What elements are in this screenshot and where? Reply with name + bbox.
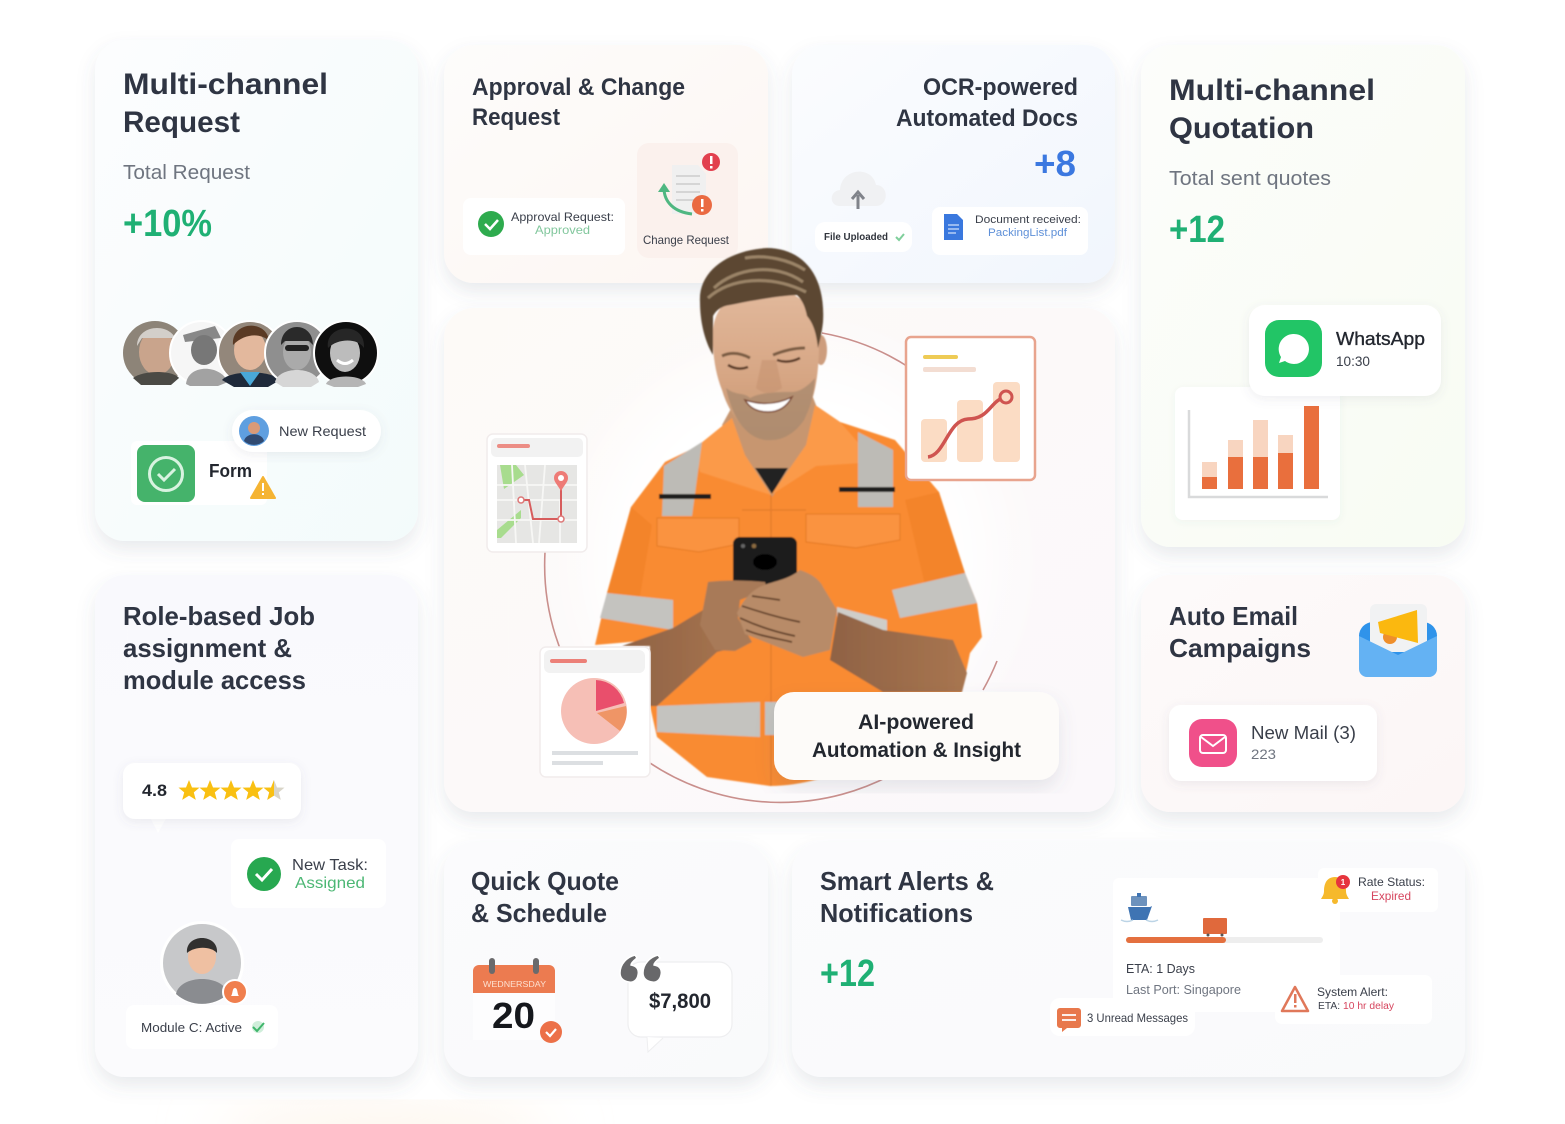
card: system alert: System Alert: xyxy=(1317,985,1388,999)
nose xyxy=(756,360,782,393)
heading: quick quote and schedule: & Schedule xyxy=(471,898,607,928)
reflective straps xyxy=(662,442,702,516)
card: rate status xyxy=(1318,868,1438,912)
card: rating: 4.8 xyxy=(142,781,167,800)
card: document received xyxy=(932,207,1088,255)
heading: approval and change request xyxy=(472,74,685,131)
card: new mail: 223 xyxy=(1251,746,1276,762)
card: system alert: ETA: 10 hr delay xyxy=(1318,1001,1394,1012)
card: new task assigned xyxy=(231,839,386,908)
quote bubble xyxy=(620,955,732,1052)
ring arcs xyxy=(545,333,997,802)
card: form xyxy=(131,441,275,505)
callout: ai-powered automation and insight xyxy=(774,692,1059,780)
card: whatsapp: 10:30 xyxy=(1336,353,1370,369)
collar xyxy=(695,405,875,495)
ear xyxy=(815,335,827,365)
panel: ocr-powered automated docs xyxy=(792,45,1115,283)
pill: new request: New Request xyxy=(279,423,366,439)
card: shipment tracking: ETA: 1 Days xyxy=(1126,961,1195,976)
card: rate status: Rate Status: xyxy=(1358,875,1425,889)
panel: multi-channel request xyxy=(95,40,418,541)
left hand xyxy=(700,580,766,651)
heading: ocr-powered automated docs: Automated Docs xyxy=(896,105,1078,132)
card: whatsapp: WhatsApp xyxy=(1336,329,1425,349)
heading: auto email campaigns: Auto Email xyxy=(1169,601,1298,631)
stat: +10%: +10% xyxy=(123,203,212,245)
heading: auto email campaigns xyxy=(1169,601,1311,663)
callout: ai-powered automation and insight: Automation & Insight xyxy=(812,739,1021,762)
left sleeve strip xyxy=(600,593,673,630)
heading: smart alerts and notifications xyxy=(820,866,994,928)
card: new task assigned: New Task: xyxy=(292,857,368,874)
phone xyxy=(733,537,797,597)
hair highlights xyxy=(708,257,806,298)
callout: ai-powered automation and insight: AI-powered xyxy=(858,711,974,734)
shirt shading xyxy=(607,492,965,596)
heading: role-based job assignment: assignment & xyxy=(123,633,292,663)
label: total request: Total Request xyxy=(123,162,250,184)
label: total sent quotes: Total sent quotes xyxy=(1169,168,1331,190)
panel: smart alerts and notifications xyxy=(792,842,1465,1077)
bar chart xyxy=(1175,387,1340,520)
heading: multi-channel quotation: Multi-channel xyxy=(1169,74,1375,107)
heading: multi-channel request: Multi-channel xyxy=(123,68,328,101)
panel: ai-powered automation and insight xyxy=(444,248,1115,812)
hair xyxy=(700,248,823,355)
heading: multi-channel request: Request xyxy=(123,106,240,139)
icon: user avatar with notification xyxy=(160,921,247,1005)
head xyxy=(713,288,819,440)
card: shipment tracking: Last Port: Singapore xyxy=(1126,982,1241,997)
heading: quick quote and schedule: Quick Quote xyxy=(471,866,619,896)
avatar group xyxy=(123,321,378,387)
heading: quick quote and schedule xyxy=(471,866,619,928)
card: rating xyxy=(123,763,301,833)
card: new mail: New Mail (3) xyxy=(1251,723,1356,743)
card: approval request xyxy=(463,198,625,255)
neck xyxy=(722,395,824,497)
body strip behind hand xyxy=(837,607,887,632)
closed eyes xyxy=(728,358,800,369)
heading: role-based job assignment: module access xyxy=(123,665,306,695)
right sleeve strip xyxy=(892,573,977,618)
heading: smart alerts and notifications: Smart Alerts & xyxy=(820,866,994,896)
panel: role-based job assignment xyxy=(95,575,418,1077)
pill: unread messages: 3 Unread Messages xyxy=(1087,1011,1188,1025)
right forearm xyxy=(830,612,967,692)
card: whatsapp xyxy=(1249,305,1441,396)
smile xyxy=(745,397,792,412)
icon: calendar xyxy=(473,958,562,1043)
heading: multi-channel request xyxy=(123,68,328,139)
chest pockets xyxy=(657,514,900,552)
card: new task assigned: Assigned xyxy=(295,875,365,892)
heading: auto email campaigns: Campaigns xyxy=(1169,633,1311,663)
heading: role-based job assignment xyxy=(123,601,315,695)
pill: module c active xyxy=(126,1005,278,1049)
stat: +8: +8 xyxy=(1034,143,1076,184)
heading: multi-channel quotation: Quotation xyxy=(1169,112,1314,145)
card: change request xyxy=(637,143,738,258)
icon: cloud upload xyxy=(832,172,886,209)
heading: ocr-powered automated docs: OCR-powered xyxy=(923,74,1078,101)
pill: file uploaded: File Uploaded xyxy=(824,232,888,243)
panel: auto email campaigns xyxy=(1141,575,1465,812)
card: form: Form xyxy=(209,461,252,481)
heading: role-based job assignment: Role-based Job xyxy=(123,601,315,631)
heading: smart alerts and notifications: Notifications xyxy=(820,898,973,928)
card: rate status: Expired xyxy=(1371,889,1411,903)
pill: file uploaded xyxy=(815,222,912,252)
pill: unread messages xyxy=(1050,998,1195,1036)
card: rate status: 1 xyxy=(1341,878,1346,887)
beard xyxy=(726,378,815,440)
finger lines xyxy=(740,596,800,642)
panel: approval and change request xyxy=(444,45,768,283)
pocket stripes xyxy=(659,487,895,499)
card: document received: PackingList.pdf xyxy=(988,227,1068,239)
icon: envelope with megaphone xyxy=(1359,604,1437,677)
quote bubble: $7,800 xyxy=(649,990,711,1013)
stat: +12 alerts: +12 xyxy=(820,953,875,995)
heading: approval and change request: Request xyxy=(472,104,560,131)
card: change request: Change Request xyxy=(643,233,730,247)
body strip xyxy=(657,702,780,737)
left forearm xyxy=(622,610,745,706)
placket xyxy=(742,495,806,786)
card: shipment tracking xyxy=(1113,878,1340,1012)
icon: calendar: 20 xyxy=(492,995,535,1036)
card: route map xyxy=(487,434,587,552)
card: growth chart xyxy=(906,337,1035,480)
heading: ocr-powered automated docs xyxy=(896,74,1078,132)
panel: quick quote and schedule xyxy=(444,842,768,1077)
pill: module c active: Module C: Active xyxy=(141,1020,242,1035)
undershirt xyxy=(755,468,788,494)
illustration: smiling worker with phone xyxy=(595,248,982,786)
heading: approval and change request: Approval & Change xyxy=(472,74,685,101)
shirt xyxy=(595,405,982,786)
card: pie chart xyxy=(540,647,650,777)
brows xyxy=(722,348,805,358)
card: approval request: Approved xyxy=(535,223,590,237)
icon: calendar: WEDNERSDAY xyxy=(483,979,546,989)
card: approval request: Approval Request: xyxy=(511,210,614,224)
card: system alert xyxy=(1275,975,1432,1024)
panel: multi-channel quotation xyxy=(1141,45,1465,547)
stat: +12 quotes: +12 xyxy=(1169,209,1225,251)
card: new mail xyxy=(1169,705,1377,781)
pill: new request xyxy=(232,410,381,452)
card: document received: Document received: xyxy=(975,214,1081,226)
right hand xyxy=(737,570,837,657)
heading: multi-channel quotation xyxy=(1169,74,1375,145)
